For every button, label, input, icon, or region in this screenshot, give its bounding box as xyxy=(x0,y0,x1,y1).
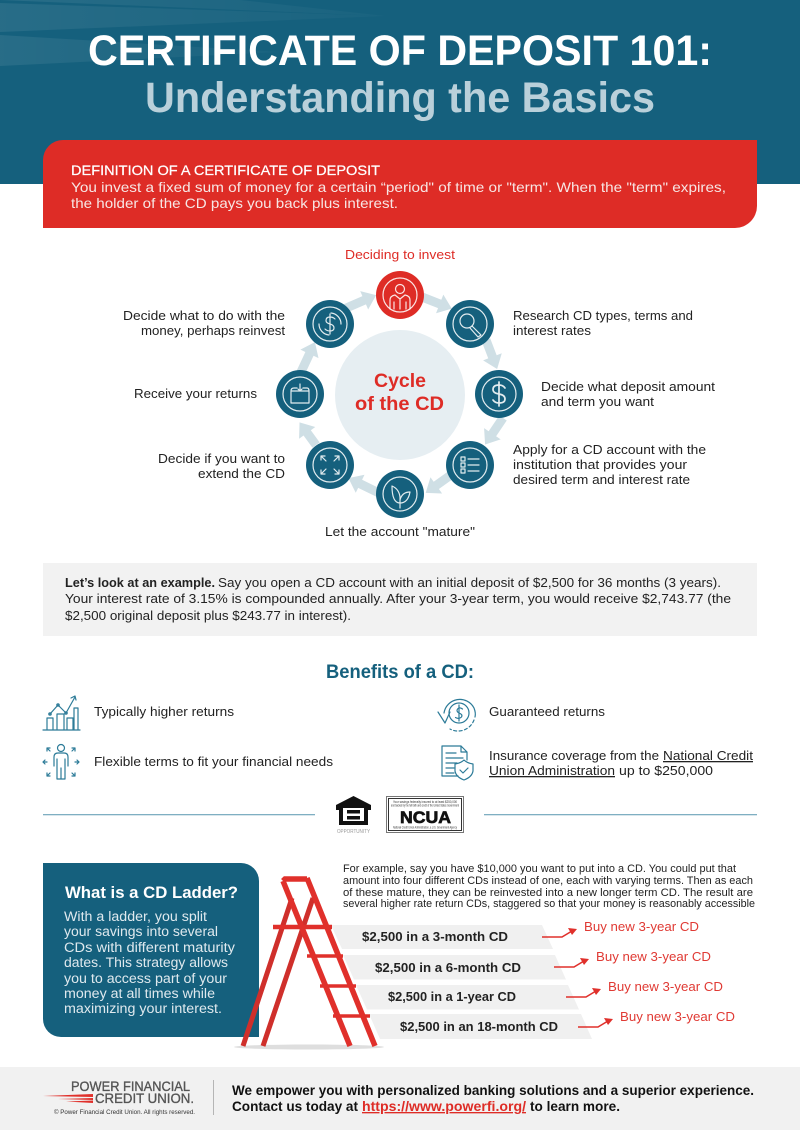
benefit: insurance coverage: up to $250,000 xyxy=(619,763,713,778)
callout: buy new CD 3: Buy new 3-year CD xyxy=(608,979,723,994)
ladder steps: $2,500 in a 1-year CD xyxy=(388,990,516,1004)
benefit: guaranteed returns xyxy=(438,699,606,731)
panel: what is a CD ladder: you to access part of your xyxy=(64,971,228,986)
label: research: interest rates xyxy=(513,323,592,338)
label: apply xyxy=(513,442,706,487)
cycle arrows xyxy=(291,286,511,502)
panel: what is a CD ladder: money at all times while xyxy=(64,986,215,1001)
ladder steps xyxy=(331,925,592,1039)
callout: buy new CD 1 xyxy=(542,919,699,937)
panel: what is a CD ladder: What is a CD Ladder? xyxy=(65,883,238,902)
icon: expand arrows xyxy=(306,441,354,489)
call to action: to learn more. xyxy=(530,1099,620,1114)
callout: buy new CD 2 xyxy=(554,949,711,967)
label: deposit amount xyxy=(541,379,715,409)
icon: reinvest xyxy=(306,300,354,348)
centre circle: Cycle xyxy=(374,371,426,392)
benefit: higher returns: Typically higher returns xyxy=(94,704,235,719)
panel: definition xyxy=(43,140,757,228)
panel: definition: DEFINITION OF A CERTIFICATE OF DEPOSIT xyxy=(71,162,380,178)
icon: dollar with circular arrow xyxy=(438,699,475,731)
benefit: insurance coverage: Union Administration xyxy=(489,763,615,778)
call to action: Contact us today at xyxy=(232,1099,359,1114)
logo: equal housing opportunity: OPPORTUNITY xyxy=(337,829,371,835)
panel: example: Your interest rate of 3.15% is compounded annually. After your 3-year term, you would receive $2,743.77 (the xyxy=(65,591,731,606)
label: receive: Receive your returns xyxy=(134,386,257,401)
logo: NCUA: Your savings federally insured to at least $250,000 xyxy=(393,800,457,804)
panel: example: $2,500 original deposit plus $243.77 in interest). xyxy=(65,608,351,623)
text: ladder example: of these mature, they can be reinvested into a new longer term CD. The result are xyxy=(343,887,753,899)
panel: what is a CD ladder: CDs with different maturity xyxy=(64,940,235,955)
benefit: guaranteed returns: Guaranteed returns xyxy=(489,704,606,719)
panel: what is a CD ladder: With a ladder, you split xyxy=(64,909,207,924)
icon: magnifier xyxy=(446,300,494,348)
label: extend: extend the CD xyxy=(198,466,285,481)
label: deciding to invest: Deciding to invest xyxy=(345,247,455,262)
logo: NCUA xyxy=(386,796,464,832)
benefit: insurance coverage: Insurance coverage from the xyxy=(489,748,659,763)
icon: checklist xyxy=(446,441,494,489)
logo: equal housing opportunity xyxy=(336,796,371,835)
callout: buy new CD 3 xyxy=(566,979,723,997)
call to action: We empower you with personalized banking solutions and a superior experience. xyxy=(232,1083,754,1098)
icon: plant xyxy=(376,470,424,518)
ladder steps: $2,500 in a 3-month CD xyxy=(362,930,508,944)
label: research xyxy=(513,308,693,338)
label: apply: Apply for a CD account with the xyxy=(513,442,706,457)
title: Understanding the Basics xyxy=(145,74,655,122)
title: CERTIFICATE OF DEPOSIT 101: xyxy=(88,27,712,75)
centre circle xyxy=(335,330,465,460)
logo: Power Financial Credit Union: CREDIT UNION. xyxy=(95,1090,194,1106)
panel: what is a CD ladder: maximizing your interest. xyxy=(64,1001,222,1016)
callout: buy new CD 2: Buy new 3-year CD xyxy=(596,949,711,964)
benefit: insurance coverage: National Credit xyxy=(663,748,753,763)
call to action xyxy=(232,1083,754,1114)
title xyxy=(88,27,712,122)
label: deposit amount: Decide what deposit amount xyxy=(541,379,715,394)
label: apply: desired term and interest rate xyxy=(513,472,690,487)
icon: person xyxy=(376,271,424,319)
call to action: https://www.powerfi.org/ xyxy=(362,1099,526,1114)
label: apply: institution that provides your xyxy=(513,457,688,472)
logo: Power Financial Credit Union: POWER FINANCIAL xyxy=(71,1078,190,1094)
label: mature: Let the account "mature" xyxy=(325,524,475,539)
label: extend xyxy=(158,451,285,481)
panel: definition: the holder of the CD pays you back plus interest. xyxy=(71,195,398,211)
icon: dollar xyxy=(475,370,523,418)
callout: buy new CD 1: Buy new 3-year CD xyxy=(584,919,699,934)
panel: what is a CD ladder: your savings into several xyxy=(64,924,218,939)
text: ladder example xyxy=(343,863,755,910)
panel: definition: You invest a fixed sum of money for a certain “period" of time or "term". When the "term" expires, xyxy=(71,179,726,195)
panel: what is a CD ladder xyxy=(43,863,259,1037)
heading: benefits: Benefits of a CD: xyxy=(326,662,474,683)
label: reinvest: Decide what to do with the xyxy=(123,308,285,323)
icon: wallet xyxy=(276,370,324,418)
centre circle: of the CD xyxy=(355,394,444,415)
label: reinvest xyxy=(123,308,285,338)
logo: NCUA: National Credit Union Administration, a U.S. Government Agency xyxy=(393,826,457,830)
logo: NCUA: and backed by the full faith and credit of the United States Government xyxy=(391,804,459,808)
label: extend: Decide if you want to xyxy=(158,451,285,466)
label: reinvest: money, perhaps reinvest xyxy=(141,323,285,338)
callout: buy new CD 4: Buy new 3-year CD xyxy=(620,1009,735,1024)
label: deposit amount: and term you want xyxy=(541,394,654,409)
panel: example: Let’s look at an example. xyxy=(65,575,215,590)
logo: NCUA: NCUA xyxy=(400,808,451,827)
icon: rising bar chart xyxy=(43,696,80,730)
logo: Power Financial Credit Union: © Power Financial Credit Union. All rights reserved. xyxy=(54,1109,195,1116)
logo: Power Financial Credit Union xyxy=(43,1078,195,1116)
ladder steps: $2,500 in a 6-month CD xyxy=(375,961,521,975)
ladder steps: $2,500 in an 18-month CD xyxy=(400,1020,558,1034)
icon: person with arrows xyxy=(43,744,79,779)
benefit: insurance coverage xyxy=(442,746,753,780)
text: ladder example: several higher rate return CDs, staggered so that your money is reasonably accessible xyxy=(343,898,755,910)
text: ladder example: amount into four different CDs instead of one, each with varying terms. Then as each xyxy=(343,875,753,887)
text: ladder example: For example, say you have $10,000 you want to put into a CD. You could put that xyxy=(343,863,736,875)
footer xyxy=(0,1067,800,1130)
panel: example: Say you open a CD account with an initial deposit of $2,500 for 36 months (3 years). xyxy=(218,575,721,590)
benefit: flexible terms xyxy=(43,744,334,779)
callout: buy new CD 4 xyxy=(578,1009,735,1027)
benefit: higher returns xyxy=(43,696,235,730)
chart: cycle of the CD xyxy=(123,247,715,539)
illustration: red ladder xyxy=(234,878,384,1050)
icon: document with shield xyxy=(442,746,473,780)
benefit: flexible terms: Flexible terms to fit your financial needs xyxy=(94,754,334,769)
panel: example xyxy=(43,563,757,636)
header band xyxy=(0,0,800,184)
panel: what is a CD ladder: dates. This strategy allows xyxy=(64,955,228,970)
label: research: Research CD types, terms and xyxy=(513,308,693,323)
